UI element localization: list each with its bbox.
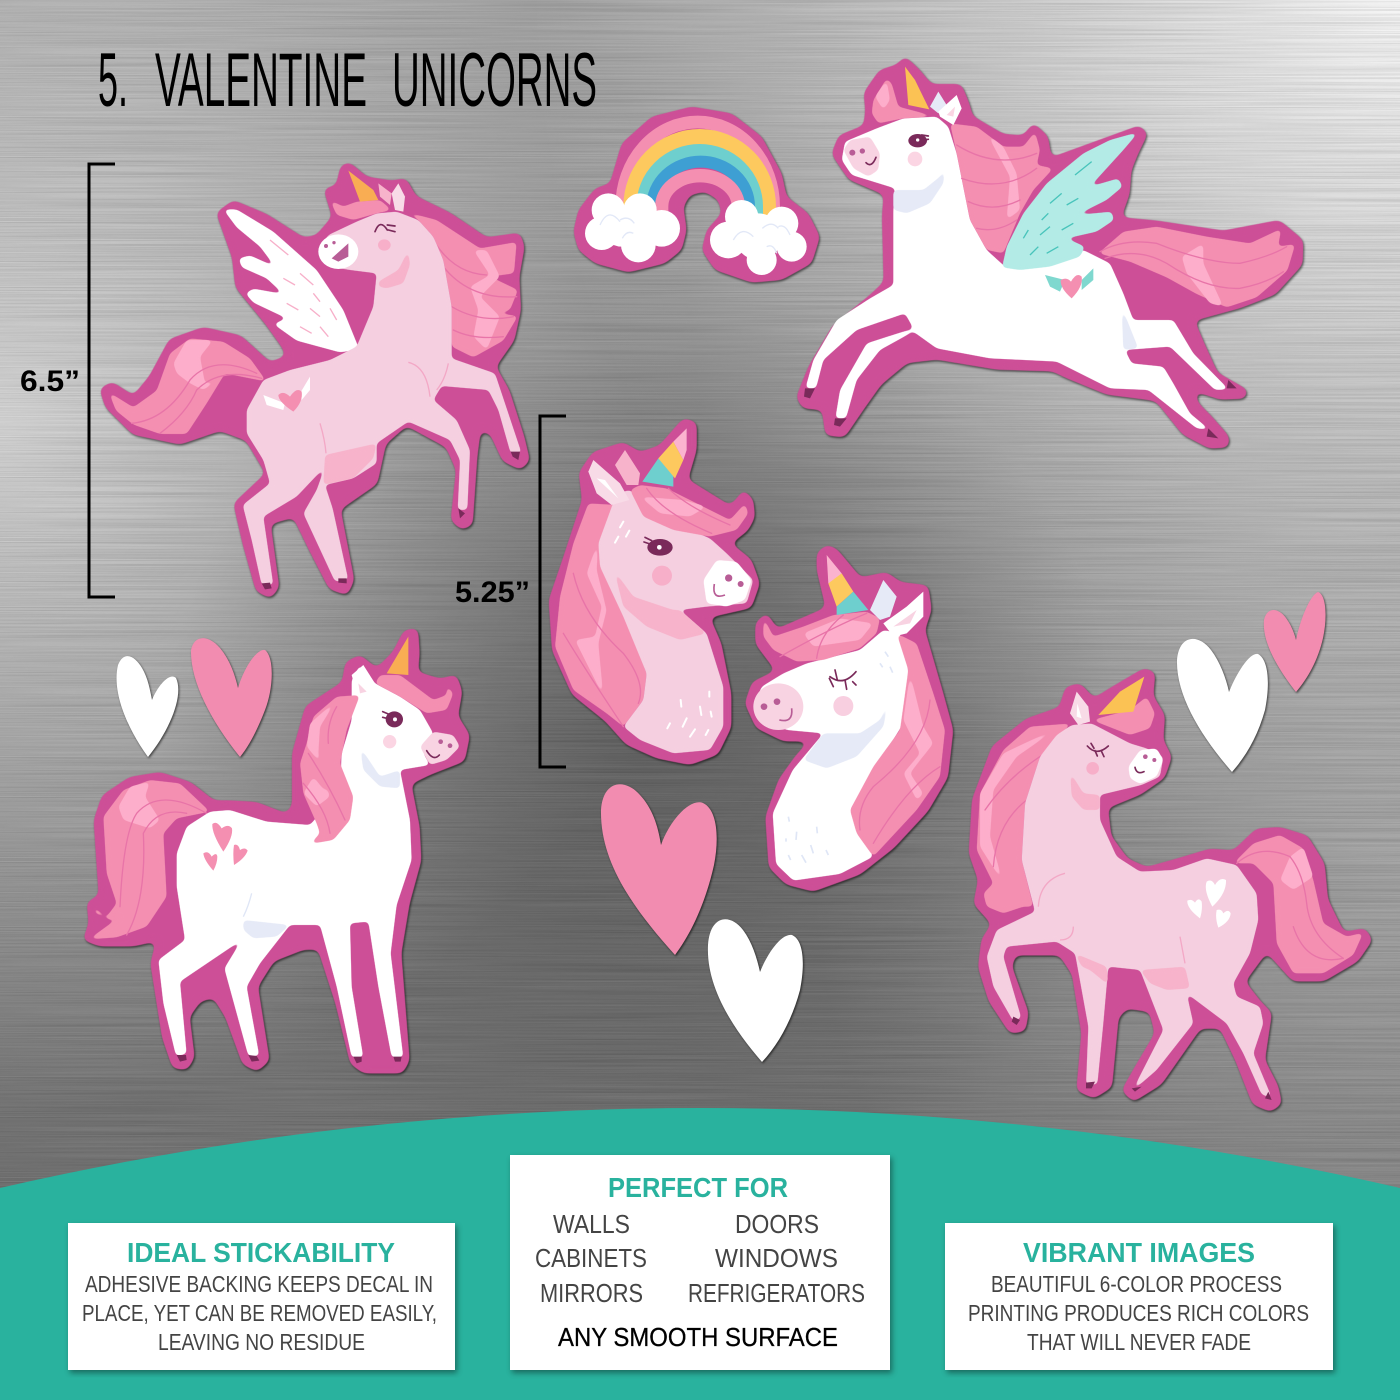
heart: white center [708,919,803,1062]
surface list: WALLS [553,1209,630,1239]
magnet: white standing unicorn [83,628,470,1073]
wing [223,209,359,352]
panel text: color process: PRINTING PRODUCES RICH COLORS [968,1300,1309,1326]
surface list: CABINETS [535,1243,647,1273]
dimension bracket: 6.5 inch [20,164,115,597]
teal wing [1002,132,1139,270]
panel heading: ideal stickability: IDEAL STICKABILITY [127,1237,395,1268]
panel text: adhesive backing: LEAVING NO RESIDUE [158,1329,365,1355]
panel text: adhesive backing [82,1271,437,1355]
surface list: REFRIGERATORS [688,1278,865,1308]
heart: small white [117,656,178,757]
heart: pink left [191,638,272,757]
surface list: DOORS [735,1209,819,1239]
clouds [585,193,807,275]
panel: perfect for [510,1155,890,1370]
surface list [535,1209,865,1308]
surface list: WINDOWS [715,1243,838,1273]
magnet: white unicorn head [745,545,953,892]
dimension bracket: 5.25 inch: 5.25” [455,576,530,609]
dimension bracket: 5.25 inch [455,416,566,767]
panel heading: perfect for: PERFECT FOR [608,1172,788,1203]
heart mark [1045,268,1093,298]
panel text: color process: BEAUTIFUL 6-COLOR PROCESS [991,1271,1282,1297]
panel text: color process: THAT WILL NEVER FADE [1027,1329,1251,1355]
hip hearts [203,823,248,871]
panel: vibrant images [945,1223,1333,1370]
magnet: rainbow with clouds [573,107,820,283]
panel text: adhesive backing: ADHESIVE BACKING KEEPS DECAL IN [85,1271,433,1297]
title: UNICORNS [392,38,597,123]
heart: small pink right [1264,592,1326,692]
hip hearts [1187,879,1231,928]
panel: ideal stickability [68,1223,455,1370]
magnet: pink unicorn head [549,418,760,765]
heart: white right [1177,639,1268,772]
magnet: white winged leaping unicorn [796,56,1303,449]
panel text: color process [968,1271,1309,1355]
surface list: MIRRORS [540,1278,643,1308]
dimension bracket: 6.5 inch: 6.5” [20,365,80,398]
magnet: pink trotting unicorn [969,668,1373,1112]
any smooth surface: ANY SMOOTH SURFACE [558,1322,838,1352]
title: VALENTINE [155,38,367,123]
title: 5. [98,38,128,123]
teal footer band [0,1108,1400,1400]
hip heart mark [263,377,310,412]
magnet: pink winged unicorn [99,162,530,599]
heart: large pink center [601,784,717,955]
panel heading: vibrant images: VIBRANT IMAGES [1023,1237,1255,1268]
panel text: adhesive backing: PLACE, YET CAN BE REMOVED EASILY, [82,1300,437,1326]
